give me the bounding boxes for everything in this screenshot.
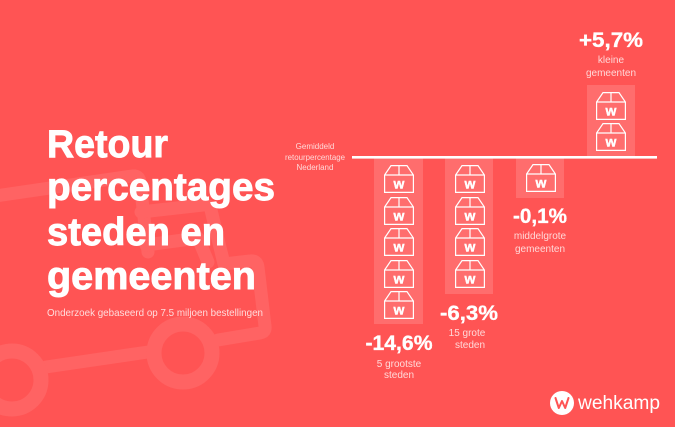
average label: Nederland	[297, 163, 333, 172]
label: -14,6%: -14,6%	[366, 332, 433, 355]
label: -14,6%: steden	[384, 370, 414, 381]
icon: box	[385, 229, 413, 255]
icon: box	[385, 261, 413, 287]
average label: retourpercentage	[285, 153, 346, 162]
label: -14,6%: 5 grootste	[377, 359, 422, 370]
icon: box: w	[464, 208, 476, 224]
label: +5,7%: gemeenten	[586, 68, 636, 79]
label: -0,1%	[513, 205, 567, 255]
icon: box	[385, 198, 413, 224]
icon: box	[385, 166, 413, 192]
label: -6,3%: steden	[455, 340, 485, 351]
column: 15 grote steden	[445, 158, 493, 294]
column: middelgrote gemeenten	[516, 158, 564, 198]
subtitle: Onderzoek gebaseerd op 7.5 miljoen bestellingen	[47, 307, 263, 319]
column: kleine gemeenten	[587, 85, 635, 156]
icon: box: w	[393, 238, 405, 254]
icon: box: w	[464, 270, 476, 286]
average baseline	[352, 156, 657, 159]
label: -0,1%: -0,1%	[513, 205, 567, 228]
title: gemeenten	[47, 255, 256, 298]
icon: box: w	[464, 238, 476, 254]
wehkamp logo: wehkamp	[577, 393, 660, 414]
label: -0,1%: middelgrote	[514, 231, 567, 242]
background truck illustration	[0, 176, 265, 409]
label: +5,7%: kleine	[598, 55, 624, 66]
column: 5 grootste steden	[374, 158, 423, 324]
label: +5,7%: +5,7%	[579, 29, 643, 52]
icon: box: w	[605, 134, 617, 150]
label: +5,7%	[579, 29, 643, 79]
icon: box: w	[535, 174, 547, 190]
label: -6,3%: -6,3%	[440, 302, 498, 325]
average label: Gemiddeld	[296, 142, 334, 151]
title	[47, 123, 275, 298]
average label	[285, 142, 346, 172]
icon: box: w	[393, 302, 405, 318]
label: -0,1%: gemeenten	[515, 244, 565, 255]
wehkamp logo	[550, 391, 660, 415]
icon: box: w	[393, 208, 405, 224]
title: steden en	[47, 211, 225, 254]
label: -14,6%	[366, 332, 433, 381]
label: -6,3%: 15 grote	[449, 328, 486, 339]
icon: box: w	[393, 270, 405, 286]
icon: box: w	[393, 176, 405, 192]
title: Retour	[47, 123, 168, 166]
icon: box: w	[464, 176, 476, 192]
icon: box: w	[605, 102, 617, 118]
label: -6,3%	[440, 302, 498, 351]
icon: box	[385, 292, 413, 318]
title: percentages	[47, 166, 275, 209]
